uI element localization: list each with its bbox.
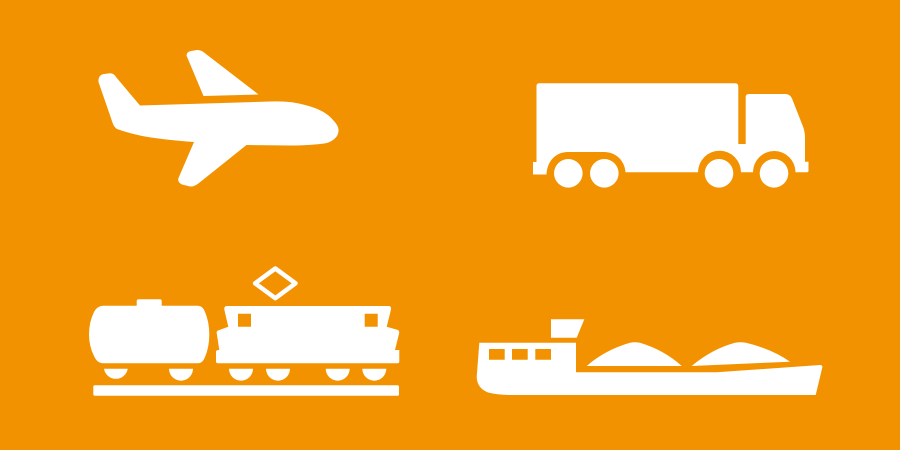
icon: airplane xyxy=(98,50,339,187)
cargo piles xyxy=(587,342,682,366)
wheels xyxy=(104,369,128,379)
icon: cargo barge xyxy=(477,319,822,395)
locomotive xyxy=(216,306,399,363)
icon: freight train xyxy=(89,268,399,396)
rail xyxy=(93,385,399,396)
icon: truck xyxy=(533,83,808,188)
funnel xyxy=(551,319,584,338)
hull xyxy=(477,343,822,395)
tank wagon xyxy=(89,299,209,363)
pantograph xyxy=(255,268,296,298)
